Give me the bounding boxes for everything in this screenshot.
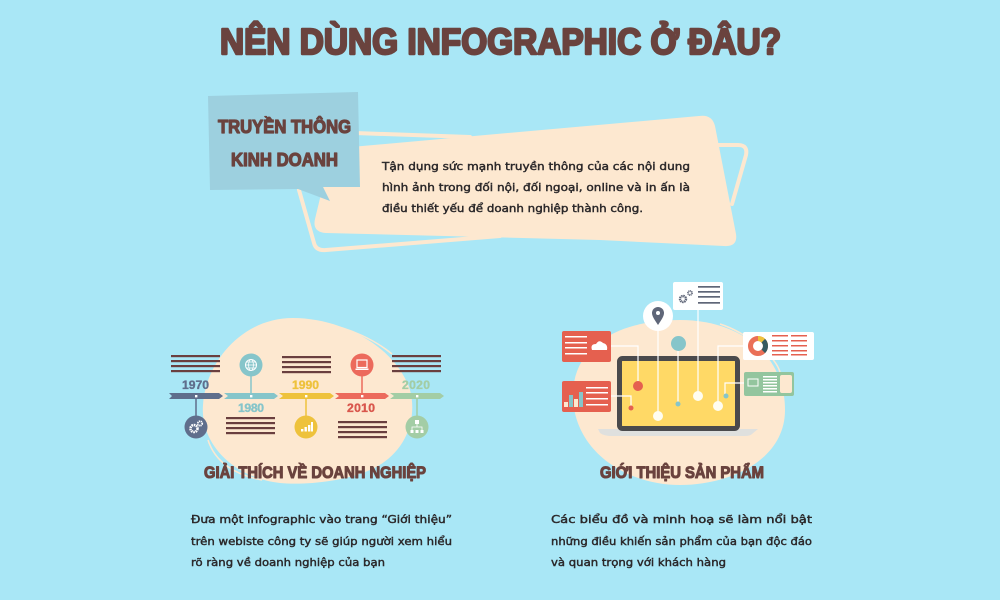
text lines (171, 355, 441, 438)
icon: laptop (350, 354, 374, 376)
panel text: Các biểu đồ và minh hoạ sẽ làm nổi bật (551, 513, 813, 526)
panel: giải thích về doanh nghiệp (169, 318, 452, 569)
year labels (182, 378, 430, 415)
card: green table (744, 372, 794, 396)
panel heading: GIỚI THIỆU SẢN PHẨM (600, 463, 764, 482)
timeline chart (169, 354, 444, 438)
cream text card (314, 116, 736, 246)
panel text: rõ ràng về doanh nghiệp của bạn (191, 556, 385, 569)
speech bubble (208, 92, 360, 201)
bubble heading (218, 116, 351, 170)
screen dots (628, 336, 728, 421)
icon: map pin (643, 301, 673, 331)
blob accent arc (720, 324, 780, 372)
panel text (191, 513, 452, 569)
title: NÊN DÙNG INFOGRAPHIC Ở ĐÂU? (220, 20, 781, 62)
panel text: trên webiste công ty sẽ giúp người xem hiểu (191, 535, 452, 548)
laptop screen (620, 358, 738, 428)
bubble heading: TRUYỀN THÔNG (218, 116, 351, 137)
card: donut chart (743, 332, 814, 360)
year labels: 2010 (347, 401, 375, 415)
card text: điều thiết yếu để doanh nghiệp thành công. (382, 202, 643, 215)
icon: globe (240, 354, 262, 376)
timeline arrows (169, 393, 223, 399)
panel heading: GIẢI THÍCH VỀ DOANH NGHIỆP (204, 463, 426, 482)
laptop base (598, 429, 758, 436)
card text: Tận dụng sức mạnh truyền thông của các nội dung (381, 160, 690, 173)
panel text (551, 513, 813, 569)
card: cloud (562, 331, 611, 362)
panel text: và quan trọng với khách hàng (551, 556, 726, 569)
connector stems (196, 375, 417, 420)
year labels: 2020 (402, 378, 430, 392)
year labels: 1980 (238, 401, 264, 415)
card: bar chart (562, 381, 611, 412)
cream blob (203, 318, 412, 484)
panel outline (299, 133, 746, 250)
icon: gears (184, 416, 208, 438)
panel text: Đưa một infographic vào trang “Giới thiệu” (191, 513, 452, 526)
cream blob (573, 320, 785, 485)
panel: truyền thông kinh doanh (208, 92, 746, 250)
connector lines (611, 310, 744, 416)
icon: bar chart (294, 416, 318, 438)
icon: org chart (406, 416, 428, 438)
laptop illustration (562, 282, 814, 436)
bubble heading: KINH DOANH (231, 150, 338, 170)
card text: hình ảnh trong đối nội, đối ngoại, online và in ấn là (382, 181, 690, 194)
year labels: 1970 (182, 378, 209, 392)
panel text: những điều khiến sản phẩm của bạn độc đáo (551, 535, 812, 548)
panel: giới thiệu sản phẩm (551, 282, 814, 569)
blob accent arcs (208, 324, 392, 480)
year labels: 1990 (292, 378, 319, 392)
card: gears (673, 282, 723, 310)
card text (381, 160, 690, 215)
